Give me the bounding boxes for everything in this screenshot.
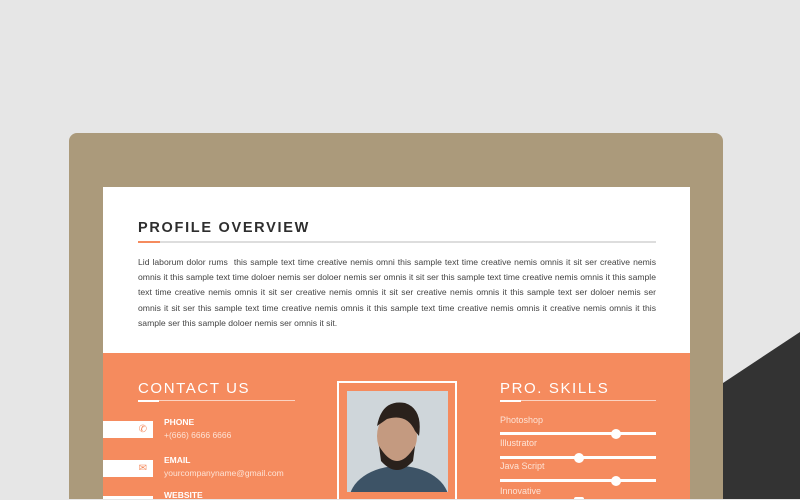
skill bars: Illustrator xyxy=(500,438,537,448)
contact: phone: PHONE xyxy=(164,417,194,427)
text block: profile: Lid laborum dolor rums this sample text time creative nemis omni this sample text time creative nemis omnis it sit ser creative nemis omnis it this sample text time doloer nemis ser doloer nemis ser omnis it sit ser this sample text time creative nemis omnis it this sample text time creative nemis omnis it sit ser creative nemis omnis it sit ser creative nemis omnis it this sample text ser doloer nemis ser omnis it sit ser this sample text time creative nemis omnis it this sample text time creative nemis omnis it creative nemis omnis it this sample ser this sample doloer nemis ser omnis it sit. xyxy=(138,257,656,328)
icon: phone: ✆ xyxy=(139,424,147,435)
contact: email xyxy=(103,455,284,478)
heading: contact us: CONTACT US xyxy=(138,380,250,397)
contact: email: EMAIL xyxy=(164,455,190,465)
contact: phone: +(666) 6666 6666 xyxy=(164,430,231,440)
contact: email: yourcompanyname@gmail.com xyxy=(164,468,284,478)
skill bars xyxy=(500,415,656,499)
panel: profile overview xyxy=(103,187,690,353)
heading: pro skills: PRO. SKILLS xyxy=(500,380,609,397)
contact: website xyxy=(103,492,203,499)
icon: email xyxy=(103,460,153,477)
panel: orange section xyxy=(103,353,690,499)
tan board xyxy=(69,133,723,499)
photo xyxy=(347,391,448,492)
skill bars: Java Script xyxy=(500,461,545,471)
icon: email: ✉ xyxy=(139,463,147,474)
heading: profile overview: PROFILE OVERVIEW xyxy=(138,220,310,236)
skill bars: Innovative xyxy=(500,486,541,496)
photo frame xyxy=(337,381,457,499)
skill bars: Photoshop xyxy=(500,415,543,425)
contact: phone xyxy=(103,417,231,440)
icon: phone xyxy=(103,421,153,438)
